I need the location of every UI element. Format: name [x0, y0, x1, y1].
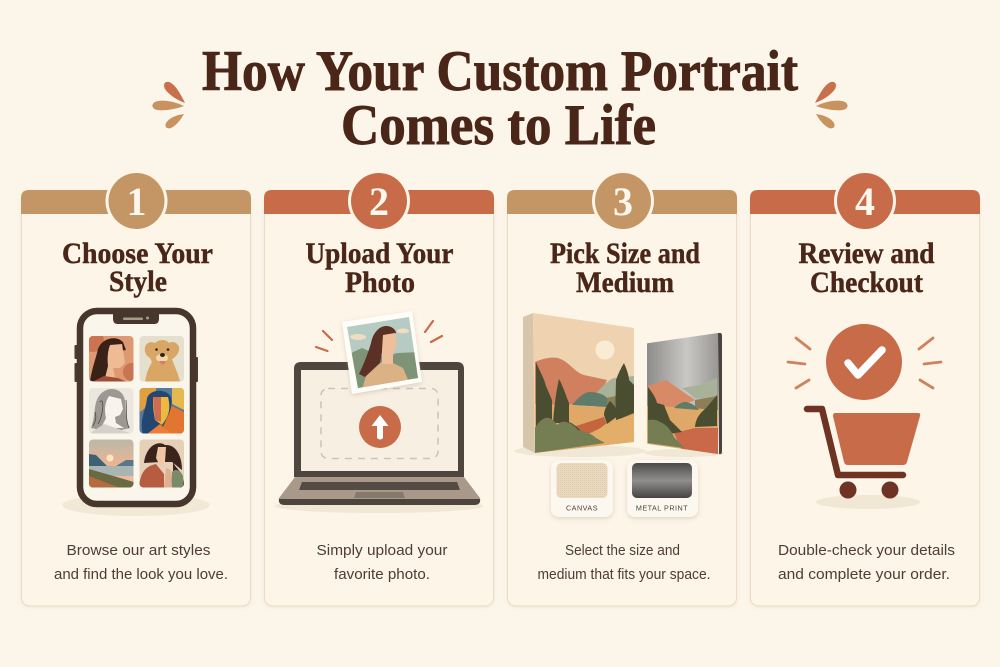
- step number badge: [592, 170, 654, 232]
- step heading: [62, 237, 213, 298]
- description: and complete your order.: [778, 567, 950, 583]
- card body: [22, 195, 250, 606]
- icon: checkmark badge: [826, 324, 902, 400]
- description: [778, 543, 955, 583]
- panel: step 4 review and checkout: [750, 170, 980, 606]
- step number badge: 2: [369, 179, 389, 224]
- step heading: Review and: [798, 237, 935, 270]
- step heading: Checkout: [810, 266, 923, 299]
- description: Simply upload your: [316, 543, 448, 559]
- style: couple portrait: [139, 439, 184, 488]
- description: favorite photo.: [334, 567, 430, 583]
- style: pop art portrait: [139, 388, 184, 434]
- panel: step 3 pick size and medium: [507, 170, 737, 606]
- step heading: Medium: [576, 266, 674, 299]
- icon: laptop upload: [275, 311, 483, 513]
- step heading: [798, 237, 935, 299]
- step number badge: 1: [126, 179, 146, 224]
- step heading: Choose Your: [62, 237, 213, 270]
- header band: [507, 190, 737, 214]
- title: Comes to Life: [341, 94, 656, 157]
- flourish: left: [152, 82, 185, 128]
- step number badge: 4: [855, 179, 875, 224]
- title: How Your Custom Portrait: [202, 40, 798, 103]
- panel: step 1 choose your style: [21, 170, 251, 606]
- step heading: Style: [109, 265, 167, 298]
- step number badge: [834, 170, 896, 232]
- description: Select the size and: [565, 543, 680, 559]
- header band: [750, 190, 980, 214]
- title: [202, 40, 798, 157]
- style: golden retriever: [139, 336, 184, 382]
- swatch: canvas: CANVAS: [566, 504, 598, 512]
- rays: [788, 338, 941, 388]
- style: pencil sketch: [89, 388, 134, 434]
- flourish: right: [815, 82, 848, 128]
- artwork: canvas print: [514, 313, 646, 457]
- description: medium that fits your space.: [538, 567, 710, 583]
- description: [316, 543, 448, 583]
- card body: [750, 195, 980, 606]
- style: watercolor portrait: [89, 336, 134, 382]
- card body: [508, 195, 736, 606]
- step number badge: [106, 170, 168, 232]
- upload button: [359, 406, 401, 448]
- description: and find the look you love.: [54, 567, 228, 583]
- step number badge: [348, 170, 410, 232]
- description: [538, 543, 710, 583]
- description: Double-check your details: [778, 543, 955, 559]
- step heading: Pick Size and: [550, 237, 700, 270]
- description: Browse our art styles: [66, 543, 210, 559]
- header band: [21, 190, 251, 214]
- artwork: metal print: [644, 333, 724, 457]
- upload drop zone: [321, 388, 438, 458]
- step heading: [306, 237, 454, 299]
- header band: [264, 190, 494, 214]
- step heading: [550, 237, 700, 299]
- swatch: canvas: [551, 460, 613, 517]
- motion rays: [316, 321, 442, 351]
- card body: [264, 195, 494, 606]
- description: [54, 543, 228, 583]
- icon: phone with art styles: [62, 311, 210, 516]
- photo print: [340, 311, 422, 394]
- swatch: metal print: METAL PRINT: [636, 504, 688, 512]
- step heading: Photo: [345, 266, 415, 299]
- step heading: Upload Your: [306, 237, 454, 270]
- panel: step 2 upload your photo: [264, 170, 494, 606]
- swatch: metal print: [627, 460, 698, 517]
- style: sunset landscape: [89, 439, 134, 488]
- icon: shopping cart: [807, 409, 920, 509]
- step number badge: 3: [613, 179, 633, 224]
